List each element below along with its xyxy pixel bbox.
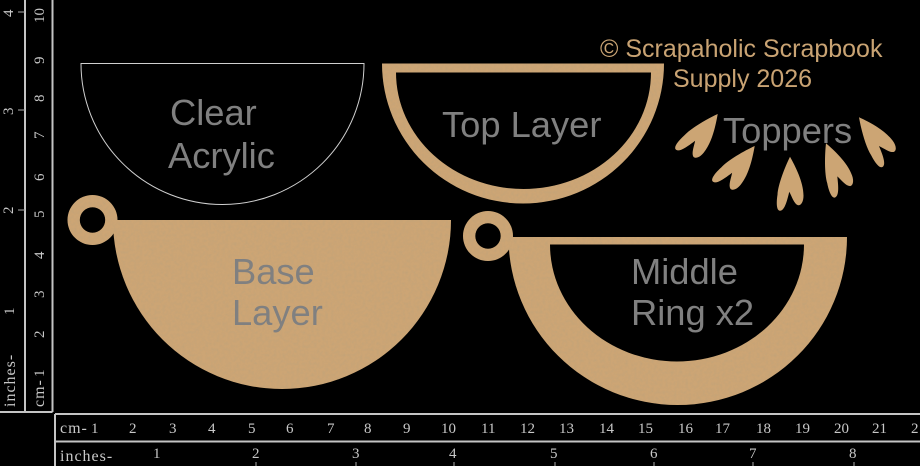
bottom ruler: 12 <box>520 421 535 437</box>
left ruler: 10 <box>32 8 48 23</box>
panel: base layer piece: Layer <box>232 292 323 333</box>
panel: base layer piece <box>67 195 451 389</box>
bottom ruler: 14 <box>599 421 614 437</box>
bottom ruler: 3 <box>352 446 360 462</box>
left ruler: 3 <box>32 290 48 298</box>
bottom ruler: 4 <box>449 446 457 462</box>
bottom ruler: 7 <box>749 446 757 462</box>
left ruler: cm- <box>31 379 48 407</box>
bottom ruler: 5 <box>550 446 558 462</box>
panel: clear acrylic piece: Acrylic <box>168 135 275 176</box>
icon: topper 3 <box>777 157 804 211</box>
panel: middle ring piece <box>463 211 847 405</box>
bottom ruler: 18 <box>756 421 771 437</box>
panel: top layer piece <box>382 64 664 204</box>
panel: middle ring piece: Ring x2 <box>631 292 754 333</box>
icon: topper 1 <box>673 106 728 164</box>
left ruler: 9 <box>32 56 48 64</box>
panel: clear acrylic piece: Clear <box>170 92 257 133</box>
left ruler: 2 <box>1 206 17 214</box>
bottom ruler: 11 <box>481 421 495 437</box>
bottom ruler: 8 <box>849 446 856 462</box>
panel: toppers <box>673 106 902 211</box>
left ruler: 3 <box>1 108 17 115</box>
bottom ruler: 17 <box>715 421 730 437</box>
left ruler: 4 <box>1 9 17 17</box>
left ruler: 4 <box>32 251 48 259</box>
bottom ruler: inches- <box>60 448 113 465</box>
bottom ruler: cm- <box>60 420 88 437</box>
bottom ruler: 2 <box>252 446 260 462</box>
left ruler: 8 <box>32 94 48 102</box>
bottom ruler: 13 <box>559 421 574 437</box>
icon: topper 2 <box>710 138 765 196</box>
bottom ruler: 7 <box>327 421 335 437</box>
copyright notice <box>600 35 883 93</box>
bottom ruler: 6 <box>650 446 658 462</box>
left ruler <box>0 0 52 412</box>
left ruler: inches- <box>2 354 19 407</box>
panel: middle ring piece: Middle <box>631 251 738 292</box>
bottom ruler: 2 <box>911 421 918 437</box>
bottom ruler: 1 <box>91 421 98 437</box>
bottom ruler: 19 <box>795 421 810 437</box>
left ruler: 7 <box>32 131 48 139</box>
icon: topper 5 <box>848 109 902 169</box>
bottom ruler: 16 <box>678 421 694 437</box>
copyright notice: Supply 2026 <box>673 65 812 93</box>
bottom ruler: 20 <box>834 421 849 437</box>
bottom ruler: 3 <box>169 421 176 437</box>
panel: toppers: Toppers <box>723 110 852 151</box>
bottom ruler: 21 <box>872 421 887 437</box>
bottom ruler <box>55 414 920 466</box>
bottom ruler: 2 <box>129 421 136 437</box>
bottom ruler: 10 <box>441 421 456 437</box>
copyright notice: © Scrapaholic Scrapbook <box>600 35 883 63</box>
icon: topper 4 <box>814 139 857 199</box>
bottom ruler: 9 <box>403 421 410 437</box>
panel: top layer piece: Top Layer <box>442 104 601 145</box>
panel: base layer piece: Base <box>232 251 315 292</box>
bottom ruler: 6 <box>286 421 294 437</box>
left ruler: 2 <box>32 330 48 338</box>
left ruler: 5 <box>32 210 48 218</box>
bottom ruler: 5 <box>248 421 256 437</box>
bottom ruler: 8 <box>364 421 372 437</box>
bottom ruler: 15 <box>638 421 653 437</box>
bottom ruler: 4 <box>208 421 216 437</box>
left ruler: 1 <box>2 308 18 315</box>
panel: clear acrylic piece <box>81 64 364 204</box>
left ruler: 6 <box>32 173 48 181</box>
bottom ruler: 1 <box>153 446 160 462</box>
left ruler: 1 <box>32 370 48 377</box>
